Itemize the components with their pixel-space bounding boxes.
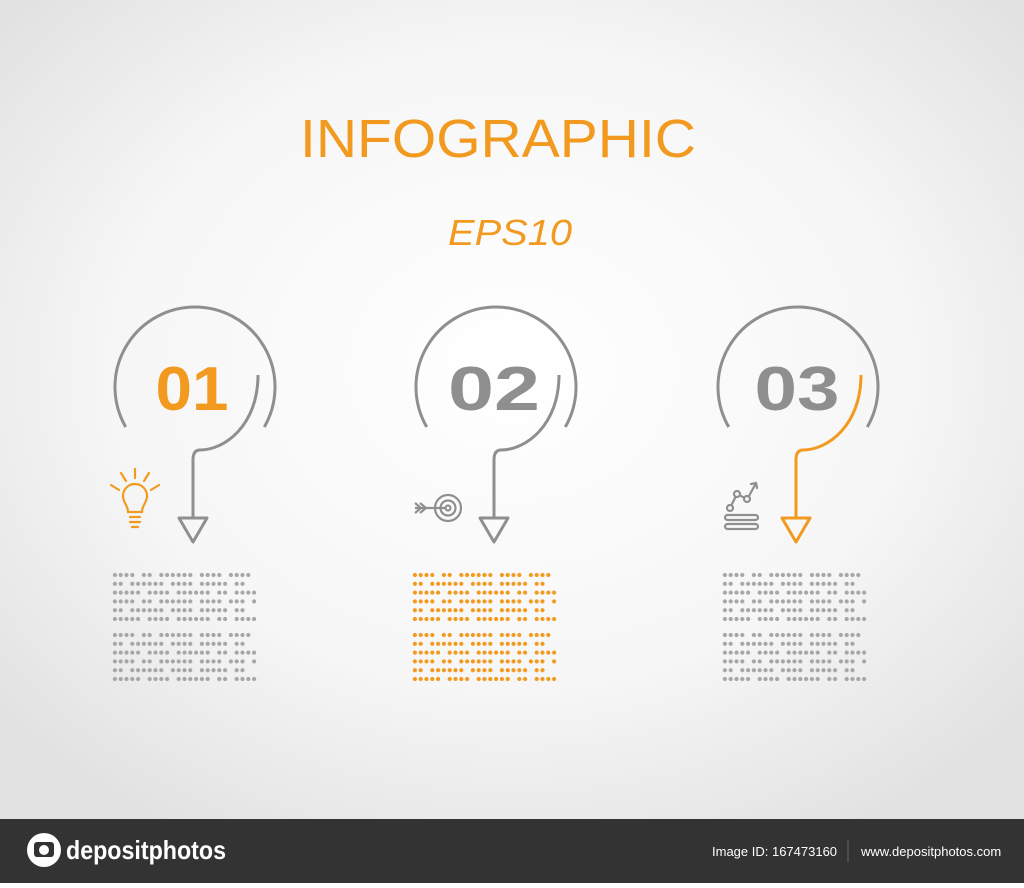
circle arc 02 [416, 307, 576, 427]
logo icon [27, 833, 61, 867]
hook arrow 03 [782, 375, 861, 542]
number 01: 01 [156, 355, 228, 424]
hook arrow 01 [179, 375, 258, 542]
footer bar [0, 819, 1024, 883]
circle arc 01 [115, 307, 275, 427]
circle arc 03 [718, 307, 878, 427]
subtitle: EPS10 [448, 212, 572, 253]
title: INFOGRAPHIC [300, 109, 696, 169]
image id: Image ID: 167473160 [712, 844, 837, 859]
text dots 01 [112, 571, 257, 683]
number 03: 03 [754, 355, 840, 424]
hook arrow 02 [480, 375, 559, 542]
text dots 03 [722, 571, 867, 683]
website: www.depositphotos.com [860, 844, 1001, 859]
panel: 01 [111, 307, 275, 683]
number 02: 02 [448, 355, 540, 424]
panel: 03 [718, 307, 878, 683]
icon: growth chart [725, 483, 758, 529]
text dots 02 [412, 571, 557, 683]
icon: light bulb [111, 469, 159, 527]
logo text: depositphotos [66, 835, 226, 865]
icon: target [415, 495, 461, 521]
panel: 02 [412, 307, 576, 683]
